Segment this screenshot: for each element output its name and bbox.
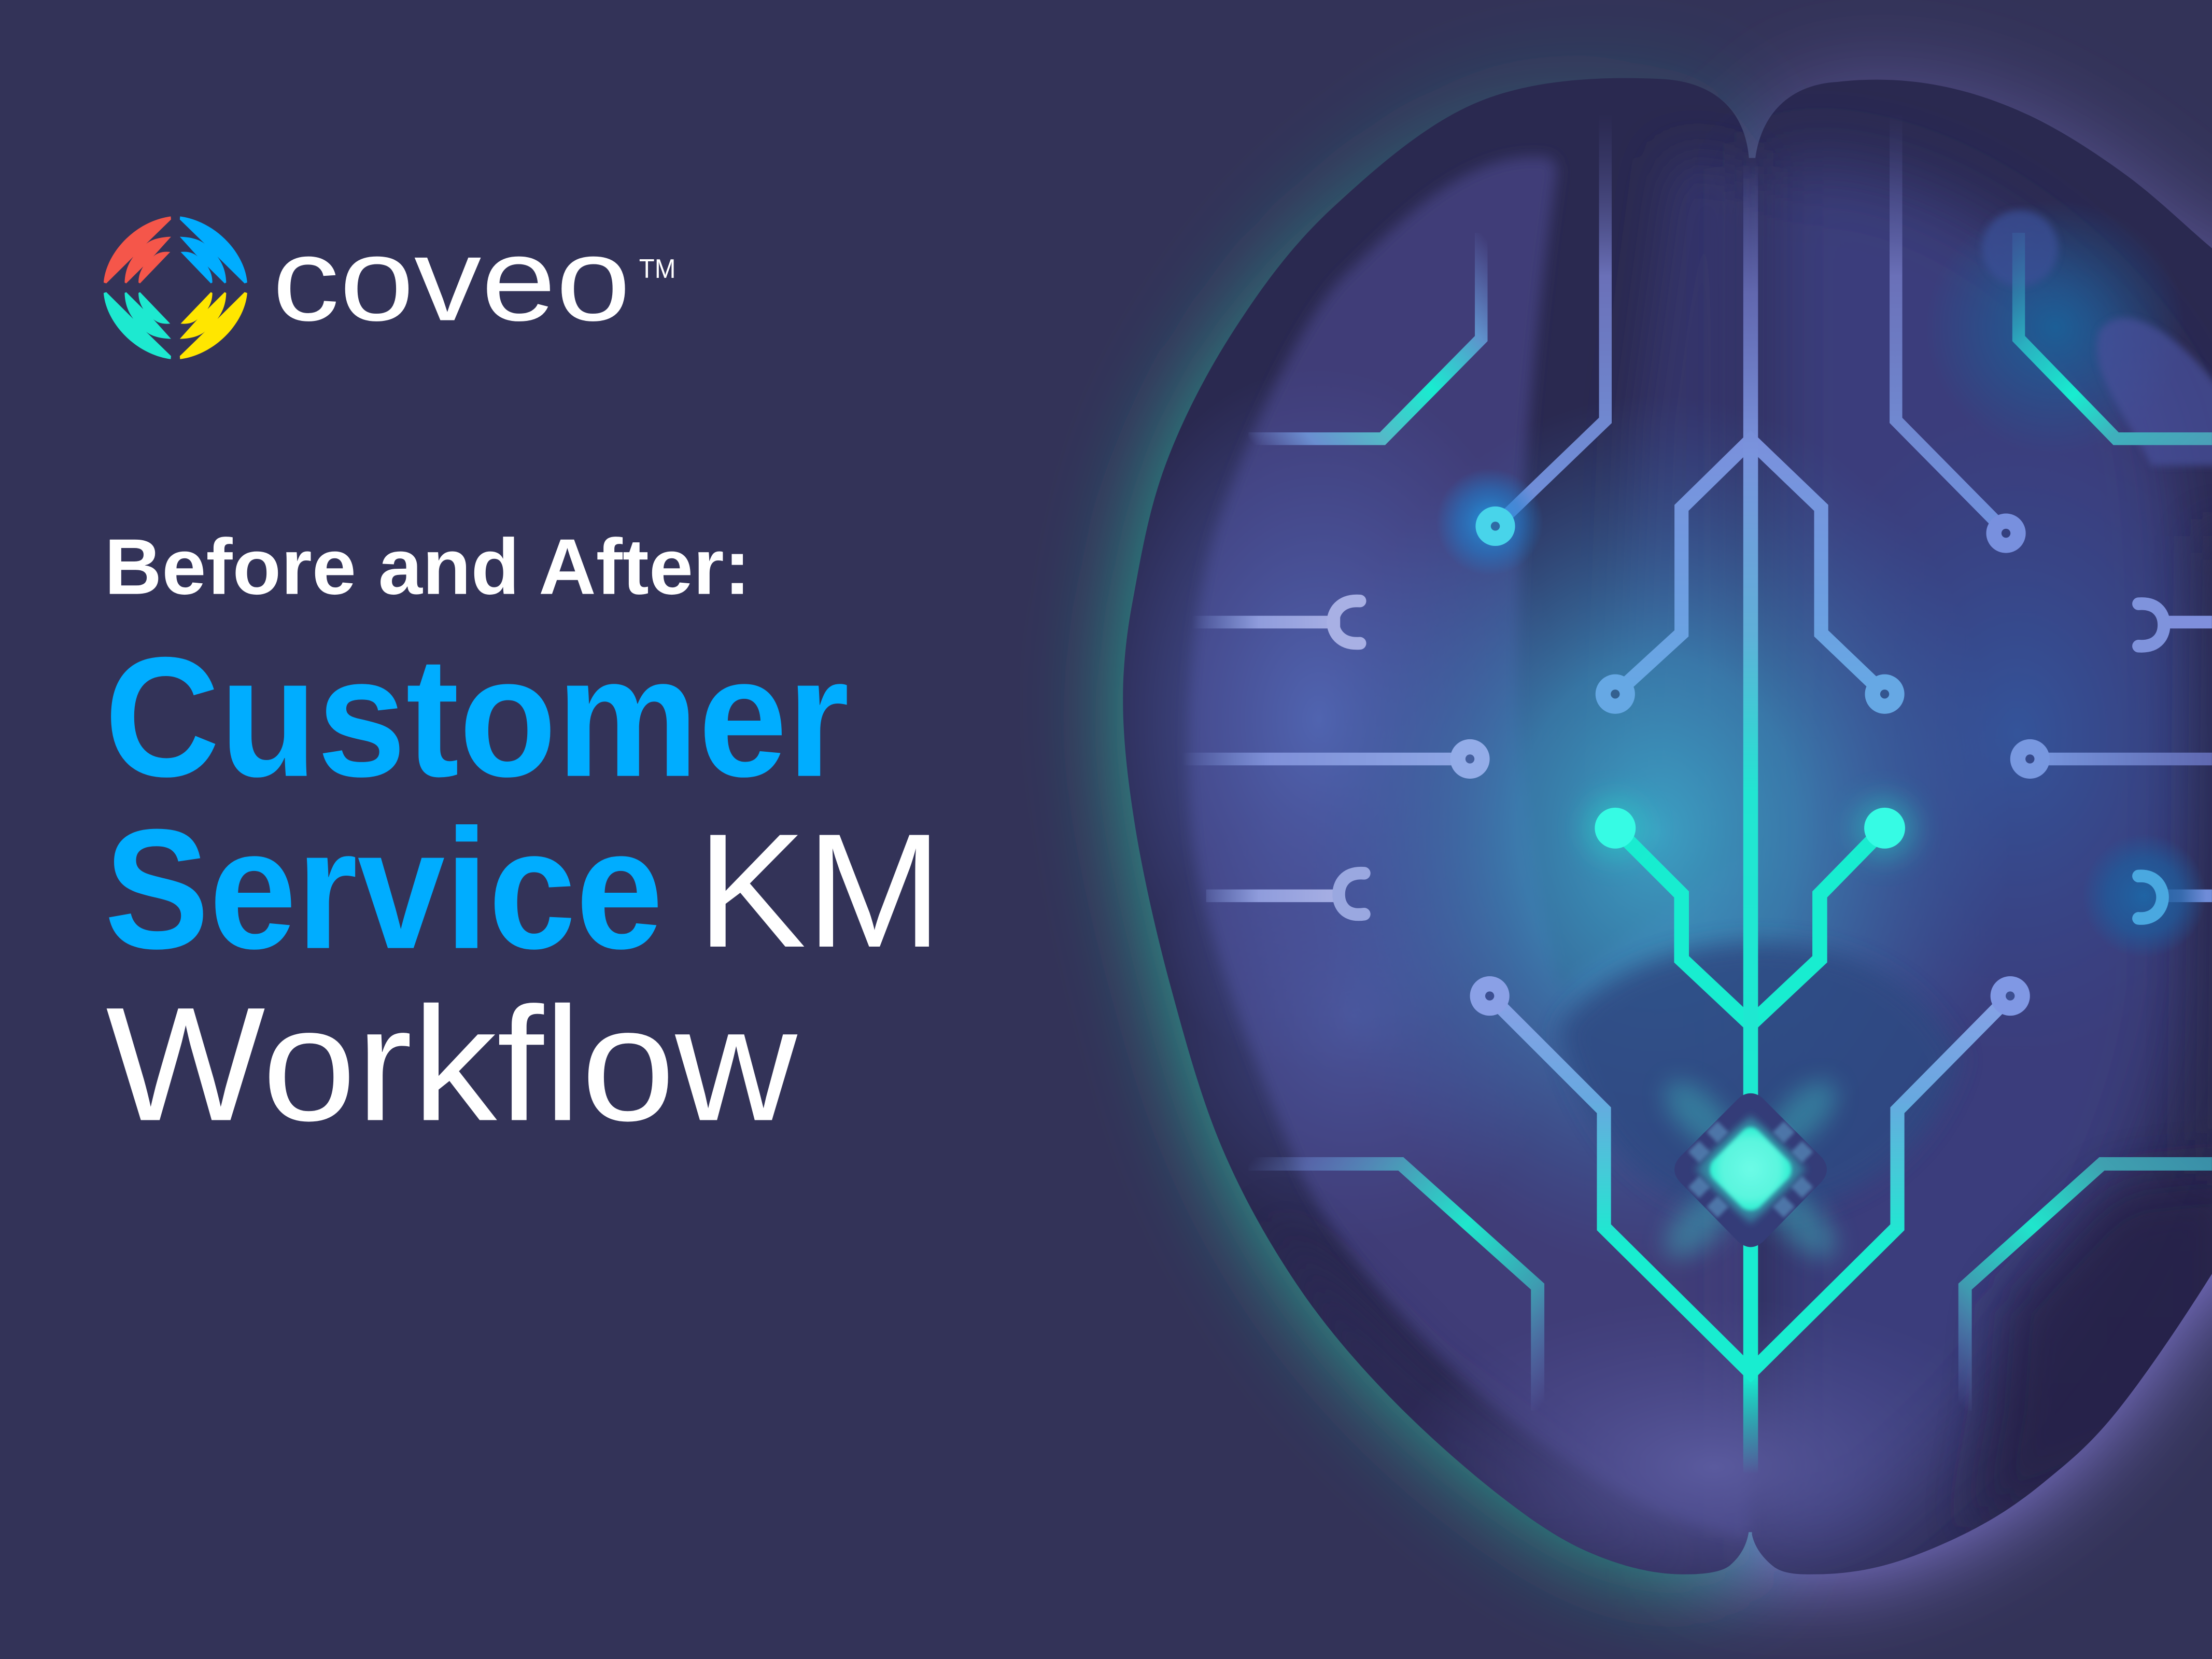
left lobe inner area: [1189, 157, 1749, 1538]
hook: upper left: [1333, 601, 1360, 643]
chip pins: [1688, 1121, 1813, 1218]
hook: upper right: [2138, 603, 2164, 646]
node: lower right: [1991, 976, 2030, 1016]
brain outer glow: [1123, 78, 2212, 1574]
dome shadow: [1559, 943, 1961, 1213]
hook: lower left: [1339, 873, 1364, 915]
line: top-right outer: [2019, 233, 2212, 439]
trademark: TM: [639, 254, 676, 284]
top-right glow blobs: [1925, 200, 2185, 454]
chip: [1674, 1093, 1827, 1247]
title: Service: [105, 794, 663, 985]
node: middle right: [2010, 739, 2050, 779]
logo: coveo: [104, 214, 676, 359]
line: right inner to node: [1896, 113, 2006, 532]
line: top-left outer: [1248, 233, 1481, 439]
node glows: [1436, 468, 2206, 958]
logo wordmark: coveo: [272, 214, 630, 346]
title: KM: [697, 800, 942, 981]
right lobe inner area: [1764, 165, 2187, 1538]
node: middle left: [1450, 739, 1490, 779]
node: fork left: [1596, 674, 1635, 714]
line: left inner to node: [1496, 113, 1605, 526]
circuit lines: [1182, 113, 2212, 1474]
line: lower outer branch: [1490, 996, 2010, 1373]
node: teal right: [1864, 808, 1905, 849]
hooks: [1333, 601, 2164, 919]
right edge shadow: [2201, 536, 2212, 1157]
line: centre vertical: [1748, 162, 1753, 1474]
line: bottom-right outer: [1965, 1164, 2212, 1411]
node: top-right: [1986, 513, 2026, 553]
node: lower left: [1470, 976, 1510, 1016]
subtitle: Before and After:: [105, 523, 751, 611]
node: teal left: [1595, 808, 1636, 849]
logo mark: [104, 216, 247, 359]
node: fork right: [1865, 674, 1905, 714]
chip glow rays: [1654, 1070, 1848, 1269]
line: teal fork: [1615, 828, 1885, 1024]
title: [105, 622, 942, 1155]
title: Workflow: [106, 974, 799, 1155]
line: upper fork: [1615, 440, 1885, 694]
chip core: [1710, 1127, 1792, 1211]
central column area: [1622, 155, 1749, 875]
node: top-left blue: [1475, 507, 1515, 546]
stubs: [1182, 622, 2212, 896]
lower left lobe fade: [1270, 1213, 1693, 1566]
circuit nodes: [1450, 507, 2050, 1016]
title: Customer: [105, 622, 849, 812]
line: bottom-left outer: [1248, 1164, 1538, 1411]
hook: lower right: [2138, 876, 2163, 919]
right lower dark edge: [1975, 1171, 2212, 1530]
brain hemispheres: [1079, 57, 2212, 1636]
